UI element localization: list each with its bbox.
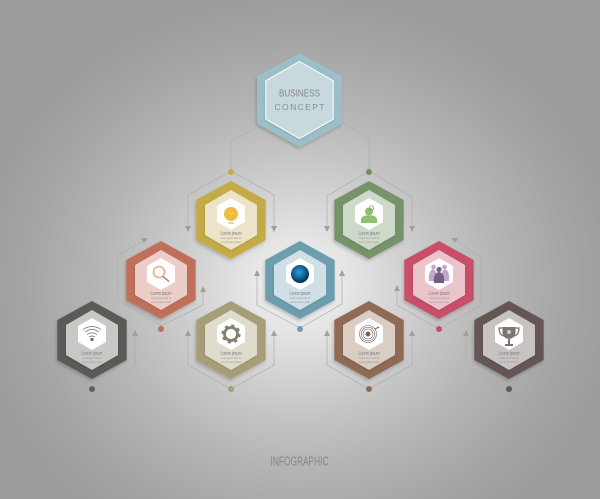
panel: green person: Lorem ipsum dolor sit bbox=[359, 236, 379, 240]
dot: green bbox=[366, 169, 372, 175]
dot: taupe bbox=[506, 386, 512, 392]
icon: gear bbox=[222, 325, 240, 343]
label text: Lorem ipsum bbox=[150, 291, 172, 297]
panel: green person: Lorem ipsum dolor bbox=[359, 240, 379, 244]
label text: Lorem ipsum bbox=[358, 351, 380, 357]
icon: people bbox=[429, 265, 449, 283]
label text: Lorem ipsum bbox=[220, 351, 242, 357]
panel: teal globe: Lorem ipsum dolor bbox=[290, 300, 310, 304]
icon: magnifier bbox=[154, 266, 169, 282]
icon: trophy bbox=[499, 327, 519, 346]
icon: wifi bbox=[83, 326, 101, 341]
icon: person bbox=[361, 206, 377, 223]
panel: tan settings bbox=[196, 301, 266, 379]
panel: teal globe: Lorem ipsum dolor sit bbox=[290, 296, 310, 300]
footer title: INFOGRAPHIC bbox=[270, 453, 328, 468]
label text: Lorem ipsum bbox=[498, 351, 520, 357]
dot: salmon bbox=[158, 326, 164, 332]
dot: tan bbox=[228, 386, 234, 392]
heading: concept: CONCEPT bbox=[274, 102, 324, 112]
connector lines and arrows bbox=[100, 123, 500, 389]
dot: dark grey bbox=[89, 386, 95, 392]
icon: globe bbox=[291, 265, 309, 283]
panel: gold idea bbox=[196, 181, 266, 259]
dot: teal bbox=[297, 326, 303, 332]
panel: red team: Lorem ipsum dolor bbox=[429, 300, 449, 304]
icon: target bbox=[360, 326, 379, 342]
panel: dark wifi: Lorem ipsum dolor sit bbox=[82, 356, 102, 360]
dot: brown bbox=[366, 386, 372, 392]
panel: dark wifi: Lorem ipsum dolor bbox=[82, 360, 102, 364]
panel: business concept bbox=[257, 53, 342, 147]
panel: salmon search: Lorem ipsum dolor sit bbox=[151, 296, 171, 300]
panel: brown target bbox=[334, 301, 404, 379]
label text: Lorem ipsum bbox=[82, 351, 103, 357]
panel: gold idea: Lorem ipsum dolor sit bbox=[221, 236, 241, 240]
panel: dark wifi bbox=[57, 301, 127, 379]
panel: red team: Lorem ipsum dolor sit bbox=[429, 296, 449, 300]
panel: gold idea: Lorem ipsum dolor bbox=[221, 240, 241, 244]
panel: tan settings: Lorem ipsum dolor sit bbox=[221, 356, 241, 360]
dot: red bbox=[436, 326, 442, 332]
panel: brown target: Lorem ipsum dolor bbox=[359, 360, 379, 364]
panel: taupe trophy: Lorem ipsum dolor sit bbox=[499, 356, 519, 360]
panel: teal globe bbox=[265, 241, 335, 319]
panel: tan settings: Lorem ipsum dolor bbox=[221, 360, 241, 364]
panel: taupe trophy: Lorem ipsum dolor bbox=[499, 360, 519, 364]
panel: brown target: Lorem ipsum dolor sit bbox=[359, 356, 379, 360]
panel: salmon search: Lorem ipsum dolor bbox=[151, 300, 171, 304]
heading: business: BUSINESS bbox=[279, 89, 320, 100]
label text: Lorem ipsum bbox=[290, 291, 311, 297]
icon: light bulb bbox=[224, 207, 238, 224]
panel: red team bbox=[404, 241, 474, 319]
panel: salmon search bbox=[126, 241, 196, 319]
label text: Lorem ipsum bbox=[358, 231, 380, 237]
label text: Lorem ipsum bbox=[428, 291, 450, 297]
panel: taupe trophy bbox=[474, 301, 544, 379]
label text: Lorem ipsum bbox=[220, 231, 242, 237]
panel: green person bbox=[334, 181, 404, 259]
dot: gold bbox=[228, 169, 234, 175]
